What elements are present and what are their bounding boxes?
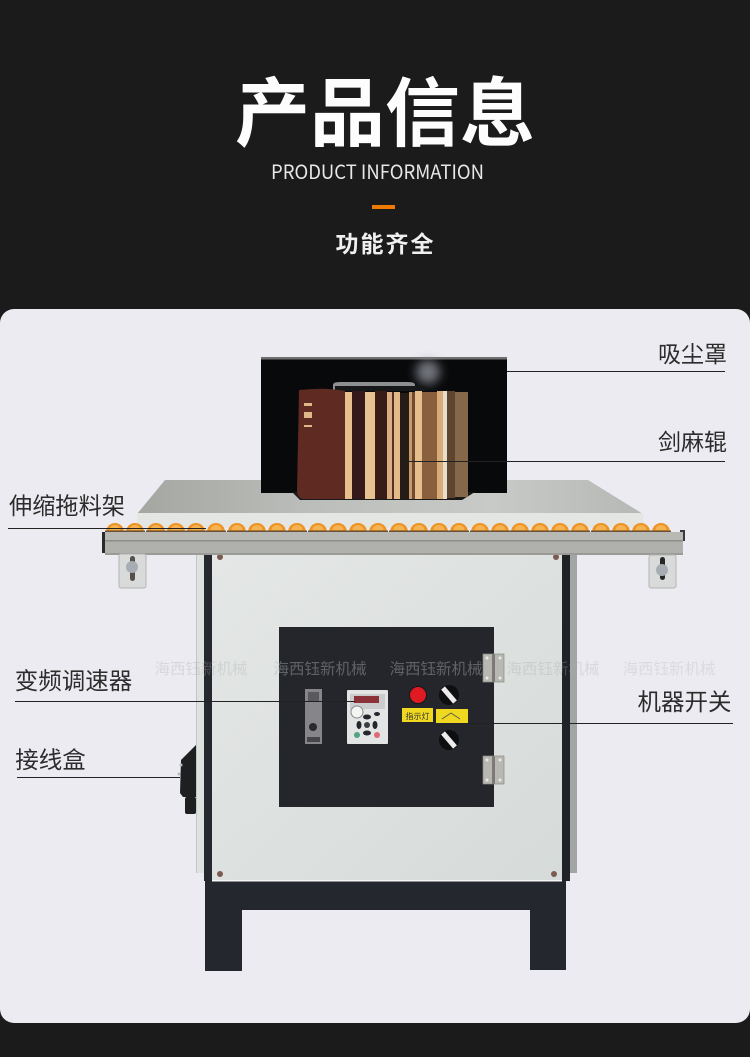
lock bbox=[305, 689, 322, 744]
watermarks: 海西钰新机械 bbox=[506, 660, 600, 678]
hood bbox=[261, 357, 507, 493]
yellow labels: 指示灯 bbox=[406, 711, 430, 721]
orange accent bar bbox=[372, 205, 395, 209]
watermarks: 海西钰新机械 bbox=[273, 660, 367, 678]
cabinet bbox=[196, 554, 577, 882]
red indicator bbox=[409, 686, 427, 704]
callout: telescopic rack: 伸缩拖料架 bbox=[9, 493, 125, 519]
hinge lower bbox=[483, 756, 504, 784]
yellow labels bbox=[402, 708, 468, 723]
subtitle: PRODUCT INFORMATION bbox=[271, 156, 484, 185]
watermarks bbox=[154, 660, 716, 678]
callout: machine switch: 机器开关 bbox=[638, 689, 732, 715]
junction box bbox=[178, 745, 196, 814]
watermarks: 海西钰新机械 bbox=[622, 660, 716, 678]
knob upper bbox=[439, 685, 459, 705]
left bracket bbox=[119, 554, 146, 588]
callout: sisal roller: 剑麻辊 bbox=[658, 429, 727, 455]
machine bbox=[102, 357, 685, 971]
tagline: 功能齐全 bbox=[336, 231, 436, 257]
knob lower bbox=[439, 730, 459, 750]
title: 产品信息 bbox=[235, 72, 535, 156]
hinge upper bbox=[483, 654, 504, 682]
table top bbox=[137, 480, 643, 528]
callout: dust hood: 吸尘罩 bbox=[658, 341, 727, 367]
callout: inverter: 变频调速器 bbox=[15, 668, 132, 694]
right bracket bbox=[649, 555, 676, 588]
inverter panel bbox=[347, 690, 388, 744]
control door bbox=[279, 627, 494, 807]
watermarks: 海西钰新机械 bbox=[389, 660, 483, 678]
legs and base frame bbox=[205, 880, 566, 971]
watermarks: 海西钰新机械 bbox=[154, 660, 248, 678]
panel: product bbox=[0, 309, 750, 1023]
callout: junction box: 接线盒 bbox=[15, 747, 86, 773]
base crescent under roller bbox=[292, 492, 475, 500]
telescopic roller rack bbox=[102, 523, 685, 588]
abrasive sisal roller bbox=[297, 389, 468, 499]
